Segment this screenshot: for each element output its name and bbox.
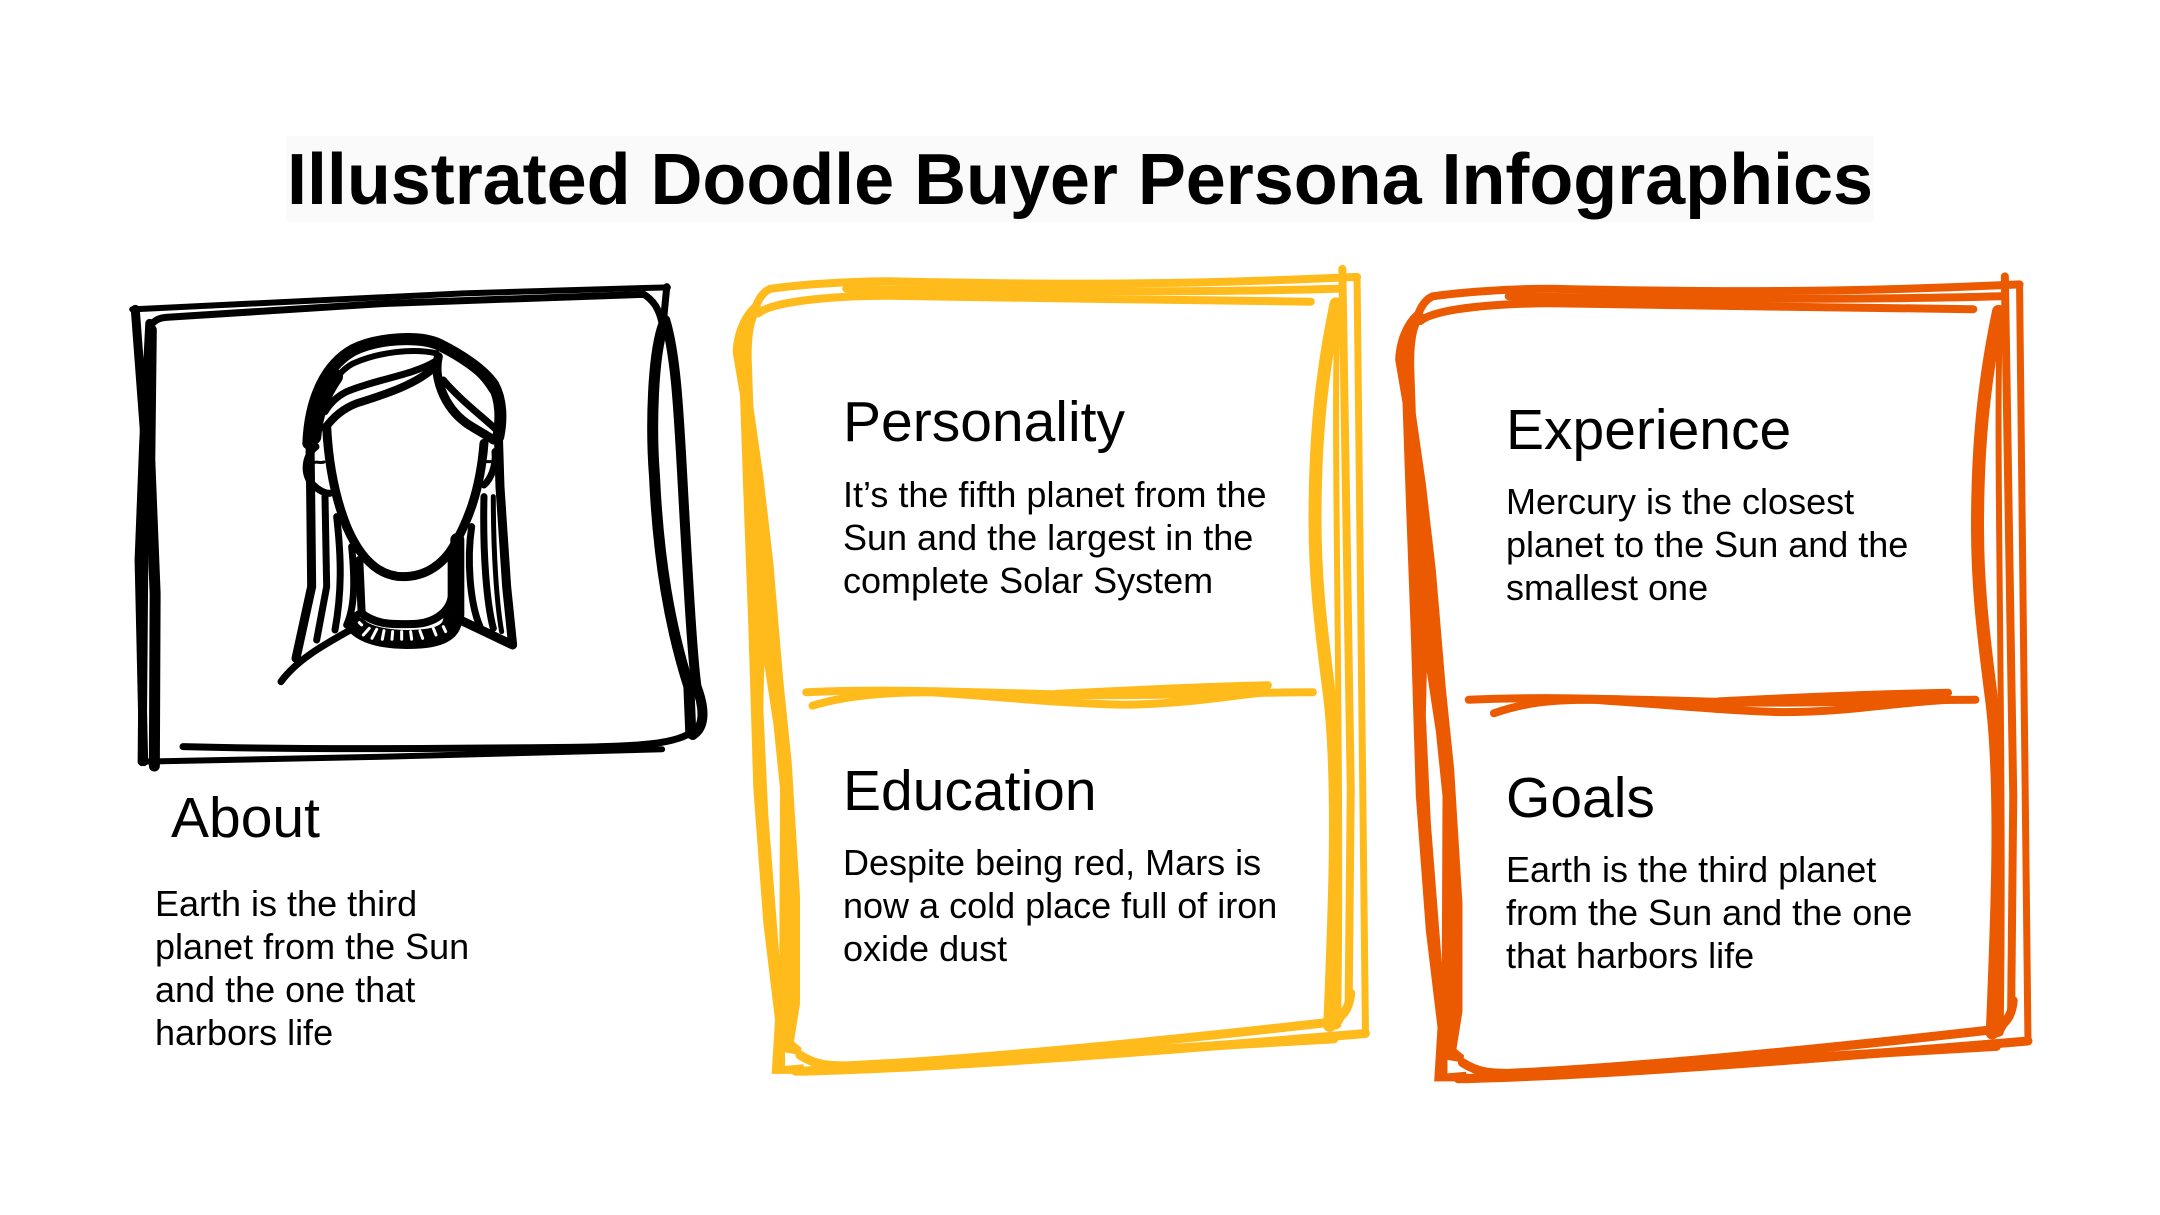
text: education body: now a cold place full of iron xyxy=(843,885,1277,926)
orange sketch frame xyxy=(1395,276,2028,1081)
title: Illustrated Doodle Buyer Persona Infographics xyxy=(287,140,1873,220)
yellow sketch frame xyxy=(733,269,1365,1074)
icon: woman portrait xyxy=(281,339,513,682)
text: experience body: Mercury is the closest xyxy=(1506,481,1854,522)
text: personality body: It’s the fifth planet from the xyxy=(843,474,1267,515)
text: personality body: complete Solar System xyxy=(843,560,1213,601)
text: about body: Earth is the third xyxy=(155,883,417,924)
text: education body: Despite being red, Mars is xyxy=(843,842,1261,883)
text: about body: harbors life xyxy=(155,1012,333,1053)
text: goals body: that harbors life xyxy=(1506,935,1754,976)
text: about body: and the one that xyxy=(155,969,415,1010)
heading: goals: Goals xyxy=(1506,766,1655,830)
orange divider xyxy=(1469,693,1975,713)
text: education body: oxide dust xyxy=(843,928,1007,969)
text: goals body: from the Sun and the one xyxy=(1506,892,1912,933)
about sketch frame xyxy=(132,287,703,766)
heading: education: Education xyxy=(843,759,1097,823)
yellow divider xyxy=(806,685,1313,706)
text: about body: planet from the Sun xyxy=(155,926,469,967)
text: goals body: Earth is the third planet xyxy=(1506,849,1876,890)
heading: about: About xyxy=(171,786,320,850)
heading: experience: Experience xyxy=(1506,398,1791,462)
text: personality body: Sun and the largest in the xyxy=(843,517,1253,558)
panel: experience and goals xyxy=(1395,276,2028,1081)
panel: personality and education xyxy=(733,269,1365,1074)
text: experience body: planet to the Sun and the xyxy=(1506,524,1908,565)
panel: about xyxy=(132,287,703,1053)
text: experience body: smallest one xyxy=(1506,567,1708,608)
heading: personality: Personality xyxy=(843,390,1125,454)
